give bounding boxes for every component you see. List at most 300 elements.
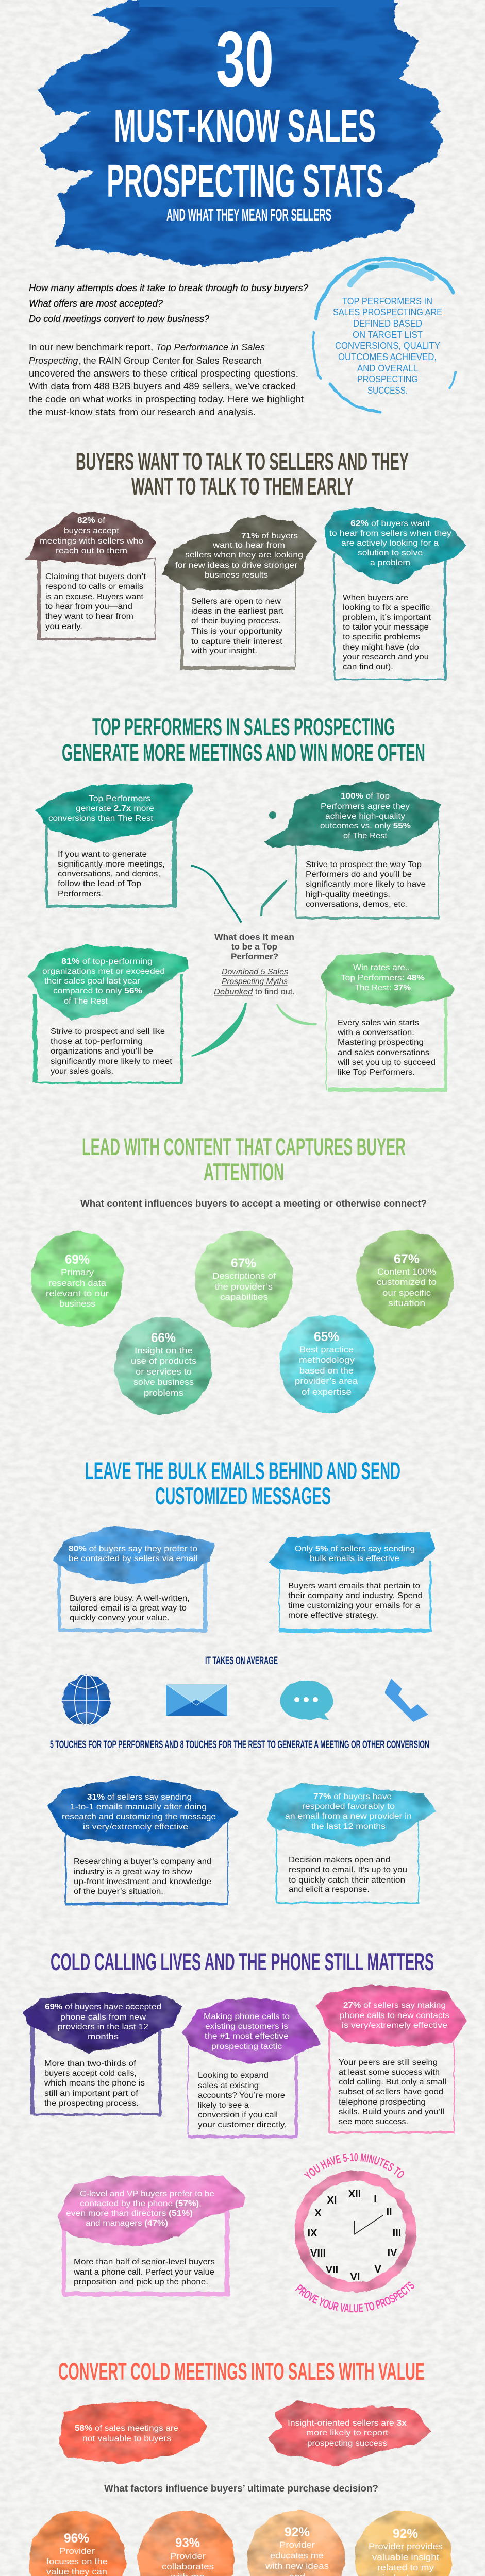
deep blue blob [48, 1776, 238, 1848]
stat text: compared to only 56% [53, 987, 142, 995]
definition text: SUCCESS. [367, 385, 408, 396]
light green blob [320, 952, 454, 1007]
stat circle: 93%: Provider [170, 2551, 206, 2561]
stat text [62, 1793, 216, 1832]
stat text: Only 5% of sellers say sending [295, 1545, 415, 1553]
panel: 5% bulk emails [270, 1532, 434, 1633]
body text: you early. [45, 622, 82, 631]
download link text: Download 5 Sales [222, 968, 288, 976]
panel: 27% of sellers [315, 1985, 467, 2133]
body text: proposition and pick up the phone. [74, 2278, 208, 2286]
body text [73, 2258, 215, 2286]
panel: insight-oriented sellers: prospecting success [307, 2439, 387, 2448]
frame [188, 2045, 298, 2138]
stat text [295, 1545, 415, 1563]
definition text: CONVERSIONS, QUALITY [335, 341, 440, 351]
label: it takes on average: IT TAKES ON AVERAGE [205, 1655, 278, 1667]
panel: 77% of buyers [266, 1784, 437, 1904]
definition text [333, 296, 442, 396]
pink blob [315, 1985, 467, 2047]
clock hands [355, 2215, 383, 2234]
arrow: to 81% panel [191, 1003, 247, 1057]
clock numerals [308, 2189, 401, 2283]
stat text: meetings with sellers who [40, 537, 143, 546]
body text: high-quality meetings, [306, 890, 390, 899]
stat text: organizations met or exceeded [42, 967, 165, 976]
body text: Claiming that buyers don’t [45, 572, 146, 581]
stat circle: 66% [115, 1317, 212, 1414]
body text: like Top Performers. [338, 1068, 415, 1077]
frame [333, 554, 446, 680]
body text [70, 1594, 190, 1622]
stat circle: 69%: research data [48, 1278, 107, 1288]
stat circle: 96%: 96% [64, 2531, 89, 2546]
body text: at least some success with [339, 2068, 440, 2077]
stat text [40, 516, 143, 555]
intro paragraph: Prospecting, the RAIN Group Center for Sales Research [29, 355, 262, 366]
body text [44, 2059, 145, 2108]
stat text: Performers agree they [321, 802, 410, 811]
stat circle: 69%: business [59, 1299, 95, 1309]
frame [33, 974, 183, 1084]
green blob [28, 945, 189, 1020]
body text: Every sales win starts [338, 1019, 419, 1027]
stat text: sellers when they are looking [185, 551, 303, 560]
stat text [45, 2003, 161, 2041]
clock ring [299, 2176, 411, 2287]
clock numerals: XII [348, 2189, 361, 2200]
stat circle: 96%: focuses on the [46, 2556, 108, 2566]
stat circle: 67% customized: situation [388, 1298, 425, 1308]
frame [30, 2025, 161, 2116]
intro paragraph: the must-know stats from our research and analysis. [29, 407, 256, 417]
body text [51, 1027, 173, 1076]
brown blob [26, 512, 156, 566]
stat text: 31% of sellers say sending [87, 1793, 192, 1802]
heading: top performers [62, 713, 425, 766]
stat circle: 67% customized: customized to [377, 1277, 437, 1287]
light blue blob [266, 1784, 437, 1846]
body text [306, 860, 426, 909]
stat circle: 93% [138, 2511, 235, 2576]
stat text: 81% of top-performing [61, 957, 153, 966]
stat text: Making phone calls to [204, 2012, 290, 2021]
stat text: and managers (47%) [86, 2219, 168, 2228]
stat circle: 67% descriptions: capabilities [220, 1292, 268, 1302]
definition text: OUTCOMES ACHIEVED, [338, 352, 437, 362]
question: to be a Top [231, 942, 277, 952]
body text [343, 594, 431, 671]
body text: tailored email is a great way to [70, 1604, 187, 1613]
panel: 2.7x more conversions [36, 784, 193, 908]
panel: insight-oriented sellers [267, 2401, 431, 2467]
body text: your research and you [343, 653, 429, 662]
body text [45, 572, 146, 631]
stat text: responded favorably to [302, 1802, 395, 1811]
body text: their company and industry. Spend [288, 1591, 423, 1600]
body text: time customizing your emails for a [288, 1601, 420, 1610]
frame [295, 814, 439, 919]
body text: This is your opportunity [191, 627, 282, 636]
stat text: to hear from sellers when they [329, 529, 451, 538]
stat circle: 65% [279, 1315, 375, 1413]
intro paragraph: With data from 488 B2B buyers and 489 sellers, we’ve cracked [29, 381, 296, 392]
body text [339, 2058, 446, 2126]
frame [279, 1561, 431, 1633]
body text: will set you up to succeed [337, 1058, 436, 1067]
stat circle: 93%: 93% [175, 2536, 200, 2550]
stat text: Top Performers: 48% [341, 974, 425, 982]
frame [180, 572, 296, 670]
panel: 69% accepted phone calls [22, 1992, 182, 2116]
stat text: prospecting tactic [211, 2042, 282, 2051]
body text: with a conversation. [337, 1028, 414, 1037]
body text: Strive to prospect the way Top [306, 860, 422, 869]
stat circle: 67% customized: Content 100% [377, 1267, 436, 1277]
body text: to quickly catch their attention [289, 1876, 405, 1885]
stat text: the #1 most effective [205, 2032, 289, 2041]
body text: likely to see a [198, 2101, 249, 2110]
blue blob [53, 1524, 216, 1584]
body text: see more success. [339, 2117, 408, 2126]
body text: More than two-thirds of [44, 2059, 137, 2068]
stat text [341, 963, 425, 992]
panel: 58% of sales meetings [58, 2401, 206, 2463]
stat text [285, 1792, 412, 1831]
stat text [329, 519, 451, 567]
body text: sales at existing [198, 2081, 259, 2090]
coral blob [267, 2401, 431, 2467]
clock numerals: III [393, 2227, 401, 2239]
stat circle: 93%: collaborates [162, 2562, 214, 2571]
magenta blob [57, 2176, 247, 2248]
body text [337, 1019, 436, 1077]
body text: Performers. [58, 890, 103, 899]
curved caption bottom: PROVE YOUR VALUE TO PROSPECTS [295, 2281, 414, 2312]
stat text: The Rest: 37% [355, 984, 411, 992]
clock numerals: II [386, 2207, 392, 2218]
body text: they might have (do [343, 643, 419, 652]
heading: lead with content [82, 1133, 406, 1185]
stat circle: 69% [31, 1232, 124, 1327]
body text: industry is a great way to show [74, 1868, 193, 1876]
stat text [48, 794, 154, 823]
clock numerals: IX [308, 2228, 317, 2239]
intro questions: Do cold meetings convert to new business? [29, 314, 209, 324]
stat circle: 92% educates: educates me [270, 2551, 324, 2561]
stat circle: 66%: use of products [131, 1356, 196, 1366]
stat circle: 69%: Primary [61, 1267, 94, 1277]
arrow: to 2.7x panel [191, 865, 242, 923]
download link text: Debunked to find out. [214, 988, 295, 996]
title block [37, 0, 442, 267]
download link text [214, 968, 295, 996]
question: What does it mean [214, 932, 294, 942]
stat circle: 96% [29, 2511, 126, 2576]
clock graphic [295, 2153, 416, 2312]
question: Performer? [231, 952, 278, 961]
body text: conversion if you call [198, 2111, 278, 2120]
intro paragraph: uncovered the answers to these critical prospecting questions. [29, 368, 298, 379]
stat text: 1-to-1 emails manually after doing [70, 1803, 207, 1811]
arrow: to 100% panel [260, 880, 288, 916]
download link text: Prospecting Myths [222, 977, 288, 986]
body text: to hear from you—and [45, 602, 132, 611]
panel: existing customers [182, 1998, 320, 2138]
body text: conversations, and demos, [58, 870, 160, 878]
stat circle: 96%: Provider [59, 2546, 95, 2556]
body text: to capture their interest [191, 637, 283, 646]
stat text: research and customizing the message [62, 1812, 216, 1821]
panel: 71% of buyers [161, 516, 317, 670]
stat text [175, 532, 303, 580]
intro paragraph: the code on what works in prospecting today. Here we highlight [29, 394, 304, 404]
stat circle: 65%: of expertise [302, 1387, 352, 1397]
body text: can find out). [343, 663, 393, 671]
stat text: 77% of buyers have [313, 1792, 392, 1801]
frame [328, 2030, 455, 2133]
body text: Decision makers open and [289, 1856, 390, 1865]
body text: Buyers are busy. A well-written, [70, 1594, 190, 1603]
body text [74, 1857, 211, 1896]
body text: respond to email. It’s up to you [289, 1866, 407, 1874]
panel: 82% of buyers [26, 512, 156, 640]
frame [326, 989, 447, 1092]
olive blob [161, 516, 317, 590]
panel: 80% prefer email [53, 1524, 216, 1632]
stat circle: 67% descriptions: the provider’s [215, 1282, 273, 1292]
frame [62, 2205, 229, 2296]
stat circle: 69%: 69% [65, 1252, 90, 1267]
body text: looking to fix a specific [343, 603, 430, 612]
definition text: SALES PROSPECTING ARE [333, 307, 442, 317]
stat circle: 67% customized [357, 1230, 454, 1328]
stat text [340, 2001, 449, 2030]
stat circle: 67% descriptions: Descriptions of [212, 1271, 276, 1281]
purple blob [182, 1998, 320, 2064]
stat text: 80% of buyers say they prefer to [69, 1545, 197, 1553]
stat text: Top Performers [89, 794, 150, 803]
question [214, 932, 294, 961]
body text: Sellers are open to new [191, 597, 281, 606]
stat text: buyers accept [64, 527, 120, 535]
stat text [320, 792, 411, 840]
body text: buyers accept cold calls, [44, 2069, 137, 2078]
stat text: 62% of buyers want [350, 519, 430, 528]
stat text: their sales goal last year [44, 977, 141, 986]
body text: still an important part of [44, 2089, 139, 2098]
stat text: 100% of Top [341, 792, 390, 801]
body text: want a phone call. Perfect your value [73, 2268, 214, 2277]
body text: and sales conversations [338, 1048, 429, 1057]
panel: 81% of top-performing organizations [28, 945, 189, 1084]
panel: c-level buyers [57, 2176, 247, 2296]
stat circle: 66%: 66% [151, 1331, 176, 1345]
body text [289, 1856, 407, 1894]
stat text: even more than directors (51%) [66, 2209, 193, 2218]
panel: insight-oriented sellers: Insight-oriented sellers are 3x [288, 2419, 407, 2428]
body text: If you want to generate [58, 850, 147, 859]
stat circle: 92% insight: related to my [377, 2563, 434, 2572]
frame [37, 551, 156, 640]
stat text: outcomes vs. only 55% [320, 822, 411, 831]
body text: of the buyer’s situation. [74, 1887, 163, 1896]
clock numerals: VIII [310, 2248, 326, 2259]
body text [198, 2071, 287, 2129]
top edge wash [139, 0, 394, 7]
panel: 62% of buyers [325, 508, 467, 680]
teal blob [325, 508, 467, 584]
frame [58, 1561, 207, 1632]
clock numerals: V [374, 2264, 381, 2275]
body text: subset of sellers have good [339, 2088, 443, 2096]
stat text: providers in the last 12 [58, 2023, 148, 2031]
indigo blob [22, 1992, 182, 2053]
arrow: to win rates panel [276, 1004, 317, 1025]
stat circle: 92% insight: Provider provides [369, 2541, 443, 2551]
stat circle: 66%: solve business [133, 1377, 194, 1387]
stat text: 27% of sellers say making [343, 2001, 446, 2010]
clock numerals: XI [327, 2195, 337, 2206]
stat text [66, 2190, 214, 2228]
stat circle: 92% educates [247, 2511, 344, 2576]
body text: organizations and you’ll be [51, 1047, 153, 1056]
stat text: 69% of buyers have accepted [45, 2003, 161, 2011]
stat text: a problem [370, 558, 410, 567]
red-orange blob [58, 2401, 206, 2463]
stat text: be contacted by sellers via email [69, 1554, 197, 1563]
watercolor ring [313, 259, 456, 412]
body text: respond to calls or emails [45, 582, 143, 591]
body text: those at top-performing [51, 1037, 143, 1046]
stat text: for new ideas to drive stronger [175, 561, 298, 570]
frame [65, 1814, 228, 1905]
body text: with your insight. [191, 647, 257, 655]
clock numerals: X [314, 2208, 322, 2219]
blue watercolor brush stroke [37, 0, 442, 267]
teal blob [36, 784, 193, 842]
body text: quickly convey your value. [70, 1614, 170, 1622]
stat circle: 65%: 65% [314, 1330, 339, 1344]
stat circle: 66%: or services to [136, 1367, 192, 1377]
body text: Performers do and you’ll be [306, 870, 412, 879]
body text [191, 597, 284, 655]
stat text: of The Rest [343, 832, 388, 840]
title number: 30 [216, 15, 274, 103]
panel: 100% of top performers [265, 781, 442, 919]
stat text: want to hear from [212, 541, 285, 550]
body text: accounts? You’re more [198, 2091, 285, 2100]
stat text: 82% of [77, 516, 106, 525]
clock numerals: I [374, 2193, 377, 2205]
stat circle: 92% educates: 92% [285, 2525, 310, 2539]
body text: your customer directly. [198, 2121, 287, 2129]
stat circle: 92% educates: with new ideas [265, 2561, 329, 2571]
center question: what is a top performer [214, 932, 295, 996]
stat text: 71% of buyers [241, 532, 298, 540]
stat text: business results [205, 571, 268, 580]
stat circle: 65%: Best practice [299, 1345, 354, 1354]
definition text: DEFINED BASED [353, 318, 422, 329]
body text: ideas in the earliest part [191, 607, 284, 616]
definition text: PROSPECTING [357, 374, 418, 384]
body text: follow the lead of Top [58, 879, 141, 888]
stat text: contacted by the phone (57%), [80, 2199, 202, 2208]
body text: significantly more likely to have [306, 880, 426, 889]
green-teal blob [265, 781, 442, 852]
stat circle: 92% insight: valuable insight [372, 2552, 439, 2562]
heading: buyers want to talk [76, 448, 409, 500]
body text: your sales goals. [51, 1067, 113, 1076]
icon: telephone [385, 1679, 428, 1722]
frame [45, 817, 177, 908]
body text: More than half of senior-level buyers [74, 2258, 215, 2266]
body text: up-front investment and knowledge [74, 1877, 211, 1886]
body text: Strive to prospect and sell like [51, 1027, 165, 1036]
curved caption top: YOU HAVE 5-10 MINUTES TO [304, 2153, 404, 2179]
stat circle: 67% customized: 67% [394, 1252, 420, 1266]
body text: skills. Build yours and you’ll [339, 2108, 444, 2116]
body text: significantly more likely to meet [51, 1057, 173, 1066]
definition text: TOP PERFORMERS IN [342, 296, 432, 307]
body text: cold calling. But only a small [339, 2078, 446, 2087]
stat text: generate 2.7x more [76, 804, 154, 813]
stat circle: 66%: problems [144, 1388, 183, 1398]
stat text: solution to solve [358, 549, 423, 557]
subtitle: AND WHAT THEY MEAN FOR SELLERS [166, 206, 331, 224]
body text: to tailor your message [343, 623, 429, 632]
subheading: purchase factors question: What factors influence buyers’ ultimate purchase decision? [104, 2483, 378, 2494]
body text: more effective strategy. [288, 1611, 378, 1620]
stat circle: 67% descriptions [195, 1231, 292, 1328]
body text: the prospecting process. [44, 2099, 139, 2108]
body text: is an excuse. Buyers want [45, 592, 144, 601]
stat text: conversions than The Rest [48, 814, 154, 823]
stat text: existing customers is [205, 2022, 288, 2031]
body text: When buyers are [343, 594, 408, 602]
intro questions: How many attempts does it take to break through to busy buyers? [29, 283, 308, 293]
panel: win rates [320, 952, 454, 1092]
body text: Buyers want emails that pertain to [288, 1582, 420, 1590]
body text: Your peers are still seeing [339, 2058, 438, 2067]
body text: Looking to expand [198, 2071, 269, 2080]
body text: of their buying process. [191, 617, 281, 625]
body text: significantly more meetings, [58, 860, 165, 869]
heading: leave the bulk emails: CUSTOMIZED MESSAGES [155, 1482, 331, 1510]
panel: 31% of sellers [48, 1776, 238, 1905]
stat text: bulk emails is effective [310, 1554, 399, 1563]
body text: to specific problems [343, 633, 420, 641]
stat circle: 65%: methodology [299, 1355, 355, 1365]
blue blob [270, 1532, 434, 1574]
clock numerals: IV [388, 2247, 397, 2259]
body text: Researching a buyer’s company and [74, 1857, 211, 1866]
body text [58, 850, 165, 899]
stat text: Win rates are... [353, 963, 412, 972]
stat circle: 66%: Insight on the [135, 1346, 193, 1355]
stat text: months [88, 2032, 119, 2041]
heading: lead with content: ATTENTION [204, 1158, 284, 1185]
panel: 58% of sales meetings: not valuable to buyers [82, 2434, 171, 2443]
stat circle: 92% educates: Provider [279, 2540, 315, 2550]
stat circle: 65%: based on the [299, 1366, 354, 1376]
intro paragraph [29, 342, 304, 417]
stat circle: 92% insight [355, 2511, 452, 2576]
stat text: of The Rest [64, 997, 108, 1006]
clock numerals: VI [350, 2272, 360, 2283]
stat text: C-level and VP buyers prefer to be [80, 2190, 214, 2198]
body text: conversations, demos, etc. [306, 900, 407, 909]
